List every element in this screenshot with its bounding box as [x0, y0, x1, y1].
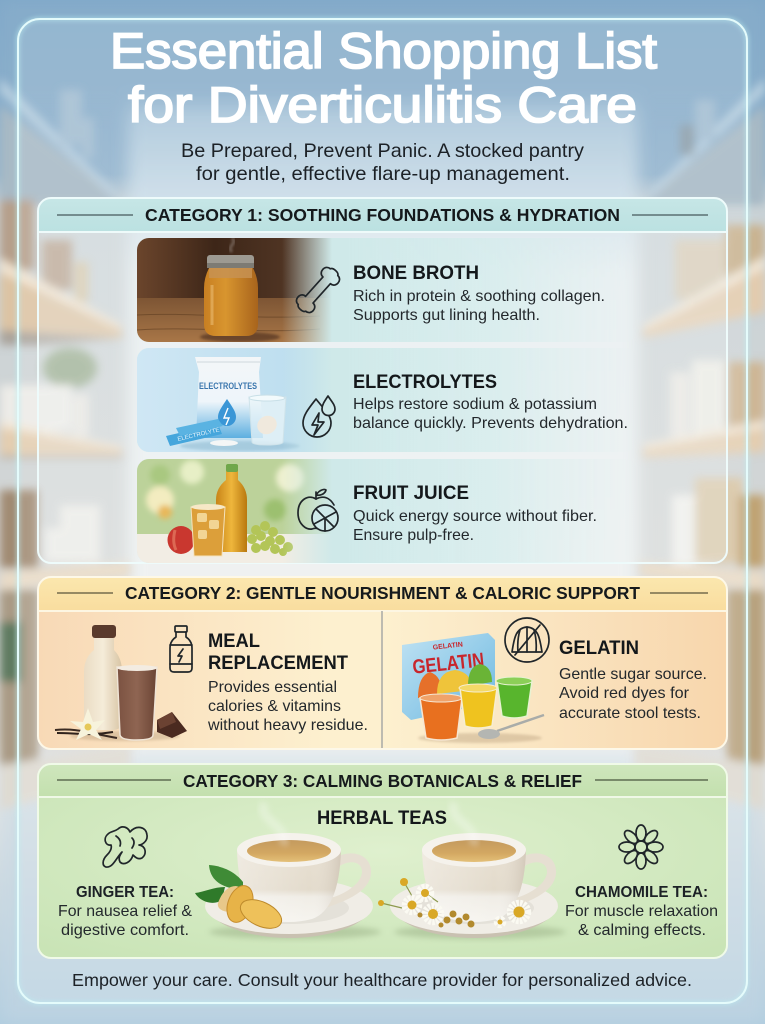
text: chamomile tea: CHAMOMILE TEA: — [575, 884, 708, 901]
category 2 header — [38, 577, 727, 611]
photo: electrolytes pouch and glass: ELECTROLYTE — [177, 427, 220, 443]
item: ginger tea — [58, 803, 381, 939]
heading: herbal teas: HERBAL TEAS — [317, 808, 447, 829]
category 1 header — [38, 198, 727, 232]
subtitle: Be Prepared, Prevent Panic. A stocked pantry — [181, 140, 584, 162]
text: gelatin: GELATIN — [559, 638, 639, 659]
text: fruit juice: FRUIT JUICE — [353, 483, 469, 504]
item: fruit juice — [137, 459, 637, 563]
text: bone broth: Rich in protein & soothing collagen. — [353, 288, 605, 305]
left side — [0, 105, 115, 205]
category 3 header — [38, 764, 727, 797]
text: electrolytes — [353, 372, 628, 432]
subtitle: for gentle, effective flare-up management. — [196, 163, 570, 185]
text: electrolytes: Helps restore sodium & potassium — [353, 396, 597, 413]
subtitle — [181, 140, 584, 185]
panel: category 3 — [38, 764, 727, 958]
icon: ginger root — [103, 827, 147, 867]
text: ginger tea: GINGER TEA: — [76, 884, 174, 901]
text: meal replacement: Provides essential — [208, 679, 337, 696]
photo: gelatin box, cups and spoon: GELATIN — [411, 649, 485, 679]
text: electrolytes: balance quickly. Prevents dehydration. — [353, 415, 628, 432]
category 1 header: CATEGORY 1: SOOTHING FOUNDATIONS & HYDRATION — [145, 205, 620, 225]
category 2 header: CATEGORY 2: GENTLE NOURISHMENT & CALORIC SUPPORT — [125, 583, 640, 603]
photo: shake bottle, glass, chocolate and vanilla — [55, 625, 187, 741]
icon: shake bottle — [170, 626, 192, 672]
icon: bone — [293, 264, 343, 316]
photo: gelatin box, cups and spoon: GELATIN — [432, 641, 463, 652]
text: gelatin: Avoid red dyes for — [559, 685, 689, 702]
icon: droplets with bolt — [303, 396, 335, 437]
text: ginger tea: digestive comfort. — [61, 922, 189, 939]
title: for Diverticulitis Care — [128, 77, 637, 133]
text: chamomile tea: For muscle relaxation — [565, 903, 718, 920]
text: meal replacement: MEAL — [208, 631, 260, 652]
text: ginger tea — [58, 884, 193, 939]
text: fruit juice — [353, 483, 597, 544]
panel: category 2 — [38, 577, 727, 749]
icon: chamomile flower — [619, 825, 663, 869]
item: gelatin — [402, 618, 707, 743]
footer note: Empower your care. Consult your healthcare provider for personalized advice. — [72, 970, 692, 990]
item: bone broth — [137, 238, 637, 342]
photo: gelatin box, cups and spoon — [402, 633, 544, 743]
text: meal replacement: without heavy residue. — [207, 717, 368, 734]
icon: apple and citrus — [298, 490, 338, 531]
text: bone broth: BONE BROTH — [353, 263, 479, 284]
panel: category 1 — [38, 198, 727, 563]
text: ginger tea: For nausea relief & — [58, 903, 193, 920]
photo: electrolytes pouch and glass — [137, 348, 312, 452]
text: meal replacement — [207, 631, 368, 734]
photo: juice bottle, glass and fruit — [137, 459, 332, 563]
photo: ginger tea cup — [195, 803, 381, 939]
photo: broth jar — [137, 238, 332, 342]
text: gelatin: accurate stool tests. — [559, 705, 701, 722]
item: meal replacement — [55, 625, 368, 741]
text: electrolytes: ELECTROLYTES — [353, 372, 497, 393]
text: chamomile tea — [565, 884, 718, 939]
text: gelatin: Gentle sugar source. — [559, 666, 707, 683]
photo: electrolytes pouch and glass: ELECTROLYTES — [199, 381, 257, 392]
text: fruit juice: Ensure pulp-free. — [353, 527, 474, 544]
title — [110, 23, 657, 133]
text: fruit juice: Quick energy source without fiber. — [353, 508, 597, 525]
icon: crossed-out jelly mold — [505, 618, 549, 662]
item: electrolytes — [137, 348, 637, 452]
text: chamomile tea: & calming effects. — [578, 922, 706, 939]
photo: chamomile tea cup — [378, 803, 566, 939]
text: gelatin — [559, 638, 707, 722]
right side — [650, 105, 765, 205]
text: bone broth — [353, 263, 605, 324]
title: Essential Shopping List — [110, 23, 657, 79]
item: chamomile tea — [378, 803, 718, 939]
text: bone broth: Supports gut lining health. — [353, 307, 540, 324]
text: meal replacement: REPLACEMENT — [208, 653, 348, 674]
text: meal replacement: calories & vitamins — [208, 698, 341, 715]
category 3 header: CATEGORY 3: CALMING BOTANICALS & RELIEF — [183, 771, 582, 791]
